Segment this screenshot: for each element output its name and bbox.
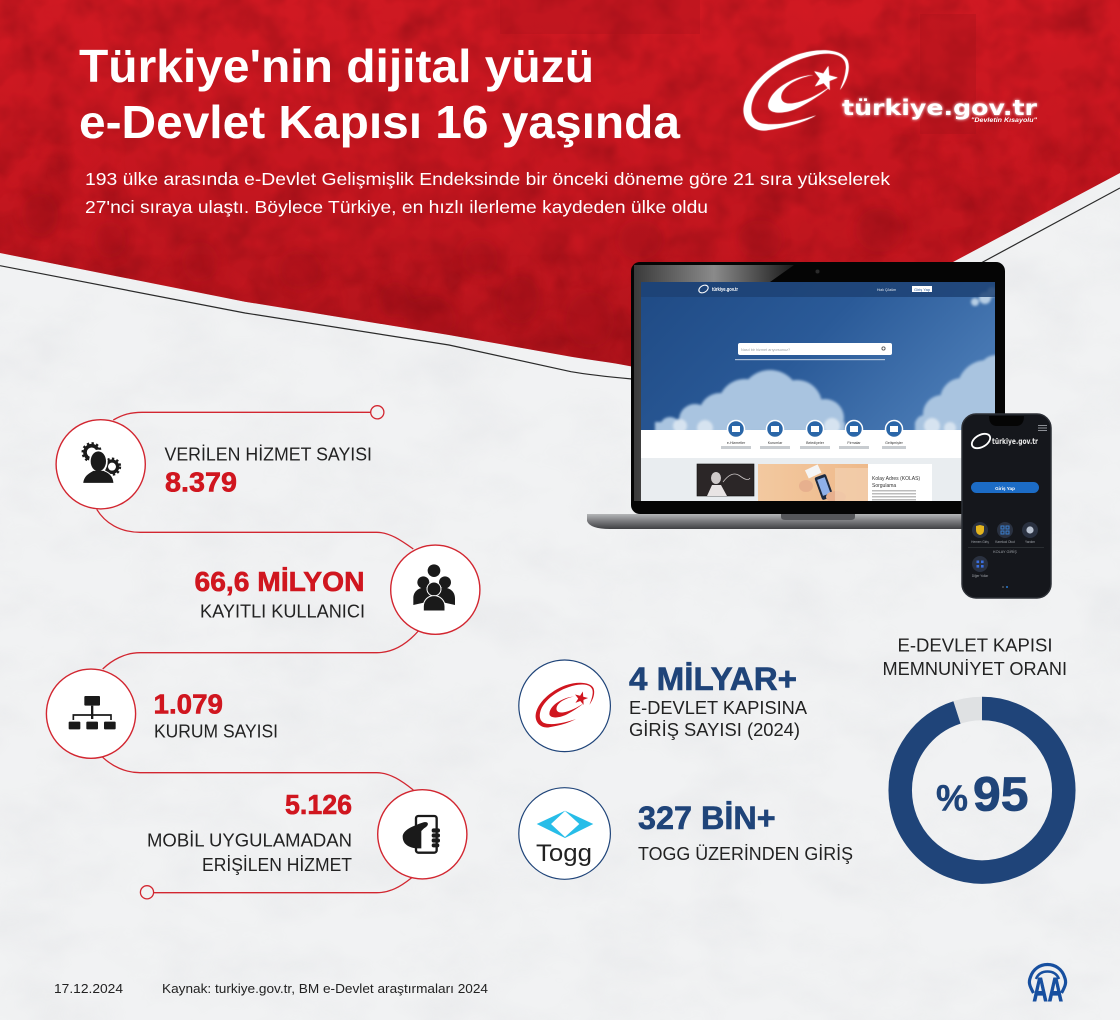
laptop lid [631,262,1005,514]
stat: mobil uygulama: 5.126 [285,789,352,820]
icon: AA logo [1029,964,1066,1008]
stat: e-devlet giriş sayısı [519,660,807,752]
white section [641,430,995,458]
icon: hand holding phone [403,816,440,853]
footer date: 17.12.2024 [54,981,123,996]
subtitle: 27'nci sıraya ulaştı. Böylece Türkiye, en hızlı ilerleme kaydeden ülke oldu [85,197,708,217]
satisfaction heading [882,636,1067,679]
stat: verilen hizmet sayısı: VERİLEN HİZMET SAYISI [164,445,372,465]
chain connector lines [97,406,418,899]
subtitle [85,169,890,217]
phone [962,414,1051,598]
stat: mobil uygulama: ERİŞİLEN HİZMET [202,855,352,875]
laptop [587,262,1049,529]
stat: verilen hizmet sayısı: 8.379 [165,467,237,498]
title: Türkiye'nin dijital yüzü [79,40,594,92]
stat: kurum sayısı: 1.079 [154,688,223,719]
service labels: Firmalar [847,441,861,445]
stat: kayıtlı kullanıcı: 66,6 MİLYON [194,566,364,597]
phone app icons [972,522,1038,572]
icon: person with gears [83,443,120,483]
satisfaction heading: MEMNUNİYET ORANI [882,659,1067,679]
service icons [728,420,902,438]
service labels [727,442,903,445]
stat: e-devlet giriş sayısı: GİRİŞ SAYISI (2024) [629,720,800,740]
phone: Giriş Yap [995,486,1015,491]
stat: kayıtlı kullanıcı: KAYITLI KULLANICI [200,601,365,621]
laptop screen: türkiye.gov.tr [712,287,738,293]
icon: org chart [69,696,116,729]
ataturk panel [697,464,754,496]
donut chart: 95% [900,708,1064,872]
stat: mobil uygulama [147,789,467,879]
icon: AA logo: AA [1032,971,1063,1008]
phone login button [971,482,1039,493]
icon: red e-devlet logo [536,683,594,727]
phone labels: Karekod Okut [995,540,1015,544]
title: e-Devlet Kapısı 16 yaşında [79,96,680,148]
service labels: e-Hizmetler [727,441,746,445]
clouds [655,287,1017,437]
laptop screen [641,282,1017,503]
title [79,40,680,148]
phone: türkiye.gov.tr [992,437,1038,446]
satisfaction heading: E-DEVLET KAPISI [898,636,1052,656]
phone labels [971,540,1035,578]
red crowd header band [0,0,1120,380]
site nav [641,282,995,297]
phone logo [969,431,993,451]
logo: türkiye.gov.tr: türkiye.gov.tr [842,96,1038,120]
icon: togg logo [536,811,593,867]
stat: togg giriş: TOGG ÜZERİNDEN GİRİŞ [638,844,853,864]
icon: people group [413,564,455,611]
stat: kayıtlı kullanıcı [194,545,480,634]
stat: mobil uygulama: MOBİL UYGULAMADAN [147,831,352,851]
black accent line left [0,266,632,379]
phone labels: Yardım [1025,540,1035,544]
laptop screen: Nasıl bir hizmet arıyorsunuz? [741,348,790,352]
phone: KOLAY GİRİŞ [993,549,1017,554]
laptop screen: Sorgulama [872,483,896,489]
news card [868,464,932,501]
donut chart: 95%: 95 [973,769,1028,822]
donut chart: 95%: % [936,778,968,819]
logo: türkiye.gov.tr [744,50,1038,130]
stat: verilen hizmet sayısı [56,420,372,509]
service labels: Kurumlar [768,441,783,445]
laptop screen: Kolay Adres (KOLAS) [872,476,920,482]
laptop base [587,514,1049,529]
photo panel [758,464,868,501]
service labels: Belediyeler [806,441,825,445]
footer source: Kaynak: turkiye.gov.tr, BM e-Devlet araştırmaları 2024 [162,981,488,996]
icon: togg logo: Togg [536,840,592,867]
stat: e-devlet giriş sayısı: E-DEVLET KAPISINA [629,698,807,718]
black accent line right [981,188,1120,263]
phone labels: Diğer Yollar [972,574,989,578]
laptop screen: Hızlı Çözüm [877,288,896,292]
service labels: Gelişmişler [885,441,904,445]
search box [738,343,892,355]
stat: togg giriş: 327 BİN+ [638,800,776,836]
subtitle: 193 ülke arasında e-Devlet Gelişmişlik Endeksinde bir önceki döneme göre 21 sıra yükselerek [85,169,890,189]
stat: kurum sayısı [46,669,278,758]
stat: kurum sayısı: KURUM SAYISI [154,721,278,741]
logo: türkiye.gov.tr: "Devletin Kısayolu" [971,117,1038,124]
phone labels: Hemen Giriş [971,540,989,544]
laptop screen: Giriş Yap [914,287,931,292]
stat: togg giriş [519,788,853,879]
stat: e-devlet giriş sayısı: 4 MİLYAR+ [629,661,797,697]
